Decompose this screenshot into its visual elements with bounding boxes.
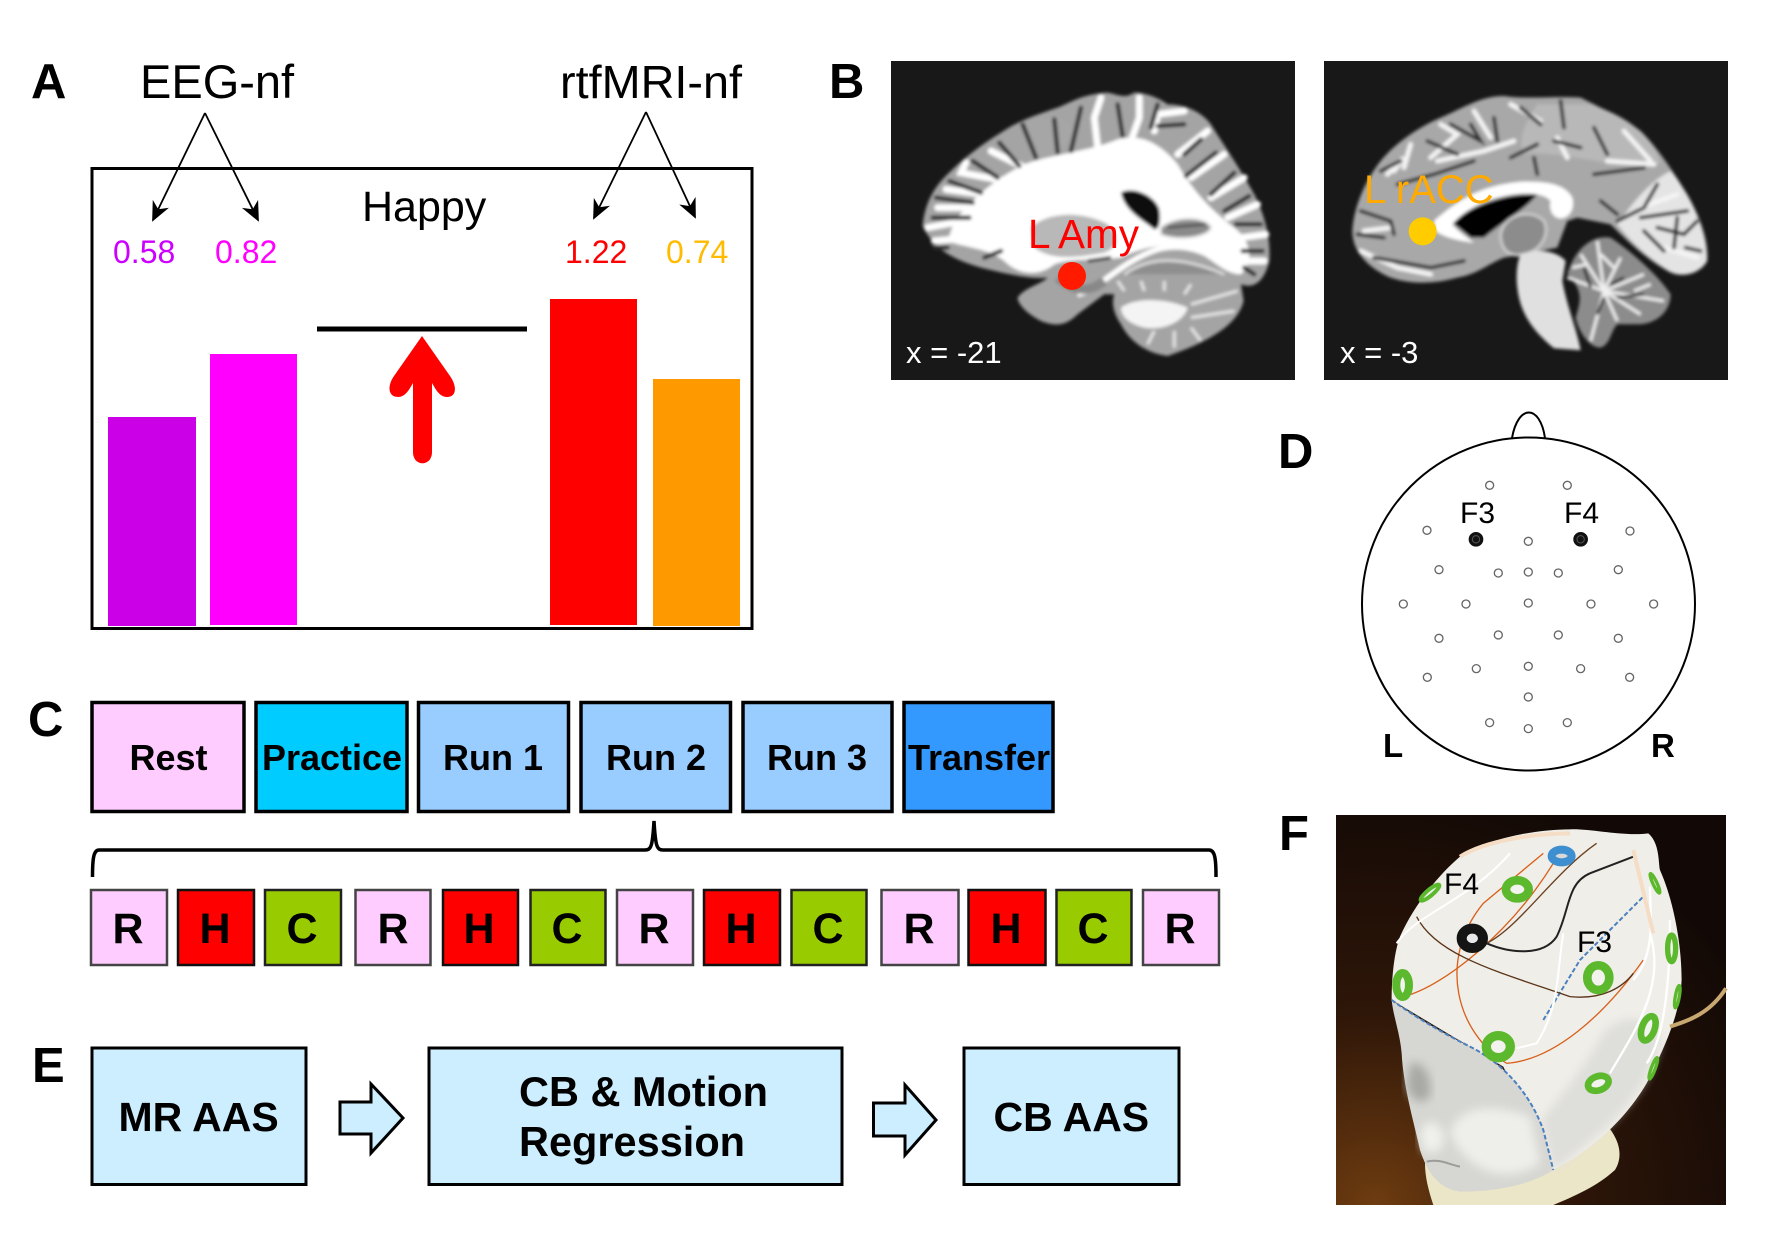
condition letters: R [377, 905, 409, 953]
bar 0.82 [210, 354, 297, 625]
bar 1.22 [550, 299, 637, 625]
arrows from EEG-nf [153, 113, 258, 220]
label F3 on photo: F3 [1577, 926, 1612, 959]
condition letters: R [1164, 905, 1196, 953]
condition letters: R [112, 905, 144, 953]
label F3: F3 [1460, 497, 1495, 530]
box CB AAS: CB AAS [994, 1094, 1149, 1140]
label x = -21: x = -21 [906, 335, 1002, 370]
session block labels: Run 3 [767, 737, 867, 778]
heading: EEG-nf: EEG-nf [140, 55, 295, 108]
black ring [1462, 929, 1483, 948]
panel letter C: C [28, 693, 63, 747]
label L rACC: L rACC [1364, 168, 1494, 212]
target line [317, 326, 527, 332]
box CB AAS [964, 1048, 1179, 1184]
blue ring [1552, 850, 1572, 862]
condition letters: H [990, 905, 1022, 953]
panel D: electrode head map [1278, 412, 1695, 770]
label x = -3: x = -3 [1340, 335, 1418, 370]
condition letters [112, 905, 1196, 953]
session block labels: Transfer [908, 737, 1050, 778]
wires [1397, 833, 1670, 1073]
label F4: F4 [1564, 497, 1599, 530]
bar 0.74 [653, 379, 740, 626]
session block labels: Practice [262, 737, 402, 778]
condition letters: C [551, 905, 583, 953]
panel letter D: D [1278, 425, 1313, 479]
condition letters: H [463, 905, 495, 953]
cable [1670, 988, 1726, 1027]
panel F: EEG cap photo [1279, 807, 1726, 1205]
session block labels: Rest [129, 737, 208, 778]
panel letter B: B [829, 55, 864, 109]
seam [1392, 897, 1643, 1170]
red dot: amygdala [1058, 262, 1086, 290]
label L Amy: L Amy [1028, 211, 1140, 257]
chart frame [92, 168, 752, 628]
panel C: session timeline [28, 693, 1219, 965]
stand [1425, 1125, 1620, 1205]
arrows from rtfMRI-nf [594, 112, 695, 218]
condition letters: C [286, 905, 318, 953]
brain slice x = -3 [1324, 61, 1728, 380]
brace [92, 821, 1216, 877]
session blocks row [92, 702, 1053, 812]
red up arrow [389, 336, 455, 463]
panel letter A: A [31, 55, 66, 109]
label R: R [1651, 727, 1675, 764]
cap [1392, 829, 1682, 1170]
session block labels: Run 1 [443, 737, 543, 778]
heading: Happy: Happy [362, 183, 487, 231]
panel letter E: E [32, 1039, 65, 1093]
condition letters: C [812, 905, 844, 953]
value 0.82: 0.82 [215, 234, 277, 270]
panel B: brain slices [829, 55, 1728, 380]
box CB and Motion Regression [429, 1048, 842, 1184]
box MR AAS [92, 1048, 306, 1184]
box MR AAS: MR AAS [118, 1094, 279, 1140]
arrow 2 [874, 1085, 936, 1155]
condition letters: H [199, 905, 231, 953]
brain slice x = -21 [891, 61, 1295, 380]
head outline with nose [1362, 412, 1695, 770]
panel A: bar chart of EEG-nf and rtfMRI-nf [31, 55, 752, 628]
photo illustration [1336, 815, 1726, 1205]
value 0.58: 0.58 [113, 234, 175, 270]
panel E: processing pipeline [32, 1039, 1179, 1184]
box CB and Motion Regression: Regression [519, 1118, 745, 1165]
arrow 1 [340, 1084, 403, 1153]
label F4 on photo: F4 [1444, 868, 1479, 901]
condition letters: R [903, 905, 935, 953]
panel letter F: F [1279, 807, 1309, 861]
session block labels: Run 2 [606, 737, 706, 778]
heading: rtfMRI-nf: rtfMRI-nf [560, 56, 743, 108]
label L: L [1383, 727, 1403, 764]
session block labels [129, 737, 1050, 778]
condition letters: H [725, 905, 757, 953]
condition blocks row [91, 890, 1219, 965]
condition letters: R [638, 905, 670, 953]
box CB and Motion Regression: CB & Motion [519, 1068, 768, 1115]
value 0.74: 0.74 [666, 234, 728, 270]
yellow dot: rACC [1409, 217, 1437, 245]
condition letters: C [1077, 905, 1109, 953]
green rings [1396, 873, 1681, 1094]
face [1392, 1000, 1553, 1192]
bar 0.58 [108, 417, 196, 626]
electrodes [1399, 481, 1658, 733]
value 1.22: 1.22 [565, 234, 627, 270]
